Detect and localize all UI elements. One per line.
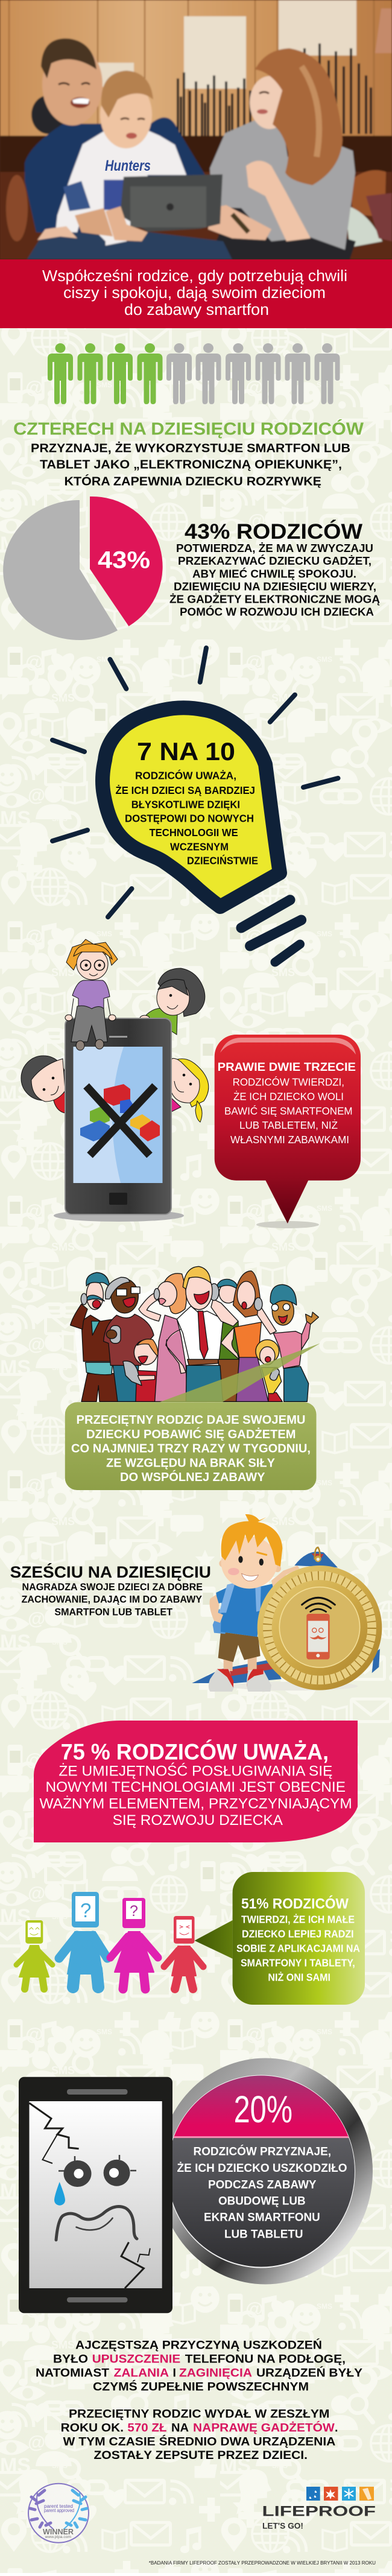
dark-skinned man with glasses xyxy=(104,1277,154,1401)
badge text: EKRAN SMARTFONU xyxy=(204,2212,320,2224)
medal xyxy=(258,1547,382,1690)
callout text: DO WSPÓLNEJ ZABAWY xyxy=(120,1470,265,1484)
callout text xyxy=(218,1061,356,1146)
round badge 20% xyxy=(158,2058,373,2284)
logo: LifeProof xyxy=(262,2487,376,2531)
callout text: CO NAJMNIEJ TRZY RAZY W TYGODNIU, xyxy=(71,1442,311,1456)
heading: four in ten parents: CZTERECH NA DZIESIĘCIU RODZICÓW xyxy=(13,419,364,439)
banner headline: do zabawy smartfon xyxy=(124,302,269,319)
pink box text: ŻE UMIEJĘTNOŚĆ POSŁUGIWANIA SIĘ xyxy=(58,1762,332,1779)
callout text: PRZECIĘTNY RODZIC DAJE SWOJEMU xyxy=(76,1413,305,1427)
boy at back xyxy=(216,1279,239,1401)
callout text: BAWIĆ SIĘ SMARTFONEM xyxy=(224,1104,353,1117)
text block: 43% of parents xyxy=(169,519,380,618)
pink box text: WAŻNYM ELEMENTEM, PRZYCZYNIAJĄCYM xyxy=(40,1795,352,1812)
text block: most common damage: BYŁO xyxy=(53,2353,88,2366)
logo icons xyxy=(306,2487,374,2501)
speech bubble text: DZIECKO LEPIEJ RADZI xyxy=(242,1928,354,1940)
text block: 43% of parents: POMÓC W ROZWOJU ICH DZIECKA xyxy=(180,606,374,618)
text block: most common damage: TELEFONU NA PODŁOGĘ, xyxy=(185,2353,346,2366)
text block: six in ten xyxy=(10,1562,211,1617)
pink box: 75% of parents xyxy=(34,1721,358,1842)
red banner xyxy=(0,259,392,328)
smartphone body xyxy=(65,1018,171,1214)
text block: most common damage: UPUSZCZENIE xyxy=(92,2353,180,2366)
text block: repair costs: W TYM CZASIE ŚREDNIO DWA URZĄDZENIA xyxy=(63,2434,335,2448)
speech bubble text xyxy=(236,1895,360,1983)
badge text: ŻE ICH DZIECKO USZKODZIŁO xyxy=(177,2162,347,2175)
text block: most common damage: ZALANIA xyxy=(114,2366,169,2379)
speech bubble text: TWIERDZI, ŻE ICH MAŁE xyxy=(241,1914,355,1926)
text block: most common damage xyxy=(36,2338,362,2394)
figure: red child xyxy=(164,1916,203,1989)
ground shadow xyxy=(229,1682,358,1690)
text block: repair costs: PRZECIĘTNY RODZIC WYDAŁ W ZESZŁYM xyxy=(69,2407,329,2420)
crying eyes and tear xyxy=(54,2155,136,2206)
figure: blue parent: ? xyxy=(80,1899,91,1921)
award badge: parent tested: WINNER xyxy=(43,2527,74,2536)
hero photo: family with tablet: Hunters xyxy=(105,157,151,174)
text block: six in ten: NAGRADZA SWOJE DZIECI ZA DOBRE xyxy=(22,1582,203,1593)
logo: LifeProof: LET'S GO! xyxy=(262,2521,303,2531)
man with red tie xyxy=(166,1266,238,1401)
girl with phone xyxy=(256,1340,282,1401)
text block: six in ten: SMARTFON LUB TABLET xyxy=(54,1607,172,1617)
callout text: LUB TABLETEM, NIŻ xyxy=(239,1119,338,1131)
bulb text: 7 in 10: TECHNOLOGII WE xyxy=(150,826,238,839)
callout text: DZIECKU POBAWIĆ SIĘ GADŻETEM xyxy=(86,1427,296,1441)
text block: electronic nanny xyxy=(31,441,350,488)
phone screen xyxy=(74,1047,163,1183)
boy head xyxy=(219,1514,282,1588)
text block: repair costs: ROKU OK. xyxy=(61,2422,124,2435)
toy bricks xyxy=(80,1084,160,1141)
text block: repair costs: 570 ZŁ xyxy=(127,2422,167,2435)
badge text: LUB TABLETU xyxy=(224,2228,303,2241)
text block: 43% of parents: 43% RODZICÓW xyxy=(185,519,362,544)
callout text: WŁASNYMI ZABAWKAMI xyxy=(230,1134,349,1146)
badge text: 20% xyxy=(234,2089,292,2131)
text block: 43% of parents: DZIEWIĘCIU NA DZIESIĘCIU WIERZY, xyxy=(174,580,376,592)
award badge: parent tested: www.ptpa.com xyxy=(45,2535,71,2539)
woman in orange top xyxy=(221,1271,276,1401)
callout text: RODZICÓW TWIERDZI, xyxy=(233,1075,344,1088)
family of device-headed figures xyxy=(16,1892,203,1989)
footnote: *BADANIA FIRMY LIFEPROOF ZOSTAŁY PRZEPROWADZONE W WIELKIEJ BRYTANII W 2013 ROKU xyxy=(149,2560,376,2566)
bulb text: 7 in 10: DZIECIŃSTWIE xyxy=(187,854,258,866)
text block: most common damage: AJCZĘSTSZĄ PRZYCZYNĄ USZKODZEŃ xyxy=(75,2338,322,2352)
text block: 43% of parents: ABY MIEĆ CHWILĘ SPOKOJU. xyxy=(192,567,356,580)
pie chart 43%: 43% xyxy=(98,547,150,574)
text block: most common damage: I xyxy=(172,2366,176,2379)
figure: lime child xyxy=(16,1920,52,1989)
text block: repair costs: . xyxy=(335,2422,338,2435)
callout: red speech pin xyxy=(215,1035,361,1228)
text block: electronic nanny: KTÓRA ZAPEWNIA DZIECKU ROZRYWKĘ xyxy=(64,474,321,488)
shirt and backpack xyxy=(209,1566,300,1637)
kid right xyxy=(169,1058,209,1122)
logo: LifeProof: LIFEPROOF xyxy=(262,2504,376,2520)
callout text: ŻE ICH DZIECKO WOLI xyxy=(233,1090,344,1102)
text block: six in ten: ZACHOWANIE, DAJĄC IM DO ZABAWY xyxy=(22,1594,202,1605)
woman in pink dress xyxy=(139,1274,187,1401)
phone shadow xyxy=(54,1210,184,1222)
badge text: RODZICÓW PRZYZNAJE, xyxy=(193,2145,331,2159)
text block: electronic nanny: PRZYZNAJE, ŻE WYKORZYSTUJE SMARTFON LUB xyxy=(31,441,350,455)
boy legs and shoes xyxy=(209,1657,271,1692)
bulb text: 7 in 10: ŻE ICH DZIECI SĄ BARDZIEJ xyxy=(116,784,255,796)
text block: repair costs: ZOSTAŁY ZEPSUTE PRZEZ DZIECI. xyxy=(94,2449,308,2462)
pink box text: NOWYMI TECHNOLOGIAMI JEST OBECNIE xyxy=(46,1779,346,1795)
banner headline xyxy=(42,268,347,319)
sad mouth xyxy=(56,2207,137,2240)
pictogram row: 4 of 10 parents xyxy=(48,343,340,404)
award badge: parent tested: parent approved xyxy=(44,2508,74,2513)
callout text xyxy=(71,1413,311,1484)
text block: most common damage: URZĄDZEŃ BYŁY xyxy=(256,2365,362,2379)
pink box text: 75 % RODZICÓW UWAŻA, xyxy=(61,1739,329,1765)
award badge: parent tested xyxy=(28,2484,89,2543)
text block: most common damage: CZYMŚ ZUPEŁNIE POWSZECHNYM xyxy=(93,2379,309,2394)
shorts xyxy=(218,1632,261,1662)
speech bubble text: 51% RODZICÓW xyxy=(241,1895,349,1912)
pie chart 43% xyxy=(3,496,163,640)
banner headline: ciszy i spokoju, dają swoim dzieciom xyxy=(63,285,326,302)
phone icon with wifi arcs xyxy=(302,1597,335,1660)
callout: green speech bubble 51% xyxy=(194,1872,365,2005)
text block: most common damage: ZAGINIĘCIA xyxy=(179,2366,252,2379)
figure: magenta parent xyxy=(110,1898,158,1989)
badge text: OBUDOWĘ LUB xyxy=(218,2195,306,2207)
speech bubble text: NIŻ ONI SAMI xyxy=(268,1971,330,1983)
broken sad smartphone xyxy=(19,2077,172,2313)
callout text: ZE WZGLĘDU NA BRAK SIŁY xyxy=(106,1457,276,1470)
bulb text: 7 in 10: RODZICÓW UWAŻA, xyxy=(135,769,236,782)
pink box text: SIĘ ROZWOJU DZIECKA xyxy=(113,1812,283,1829)
speech bubble text: SMARTFONY I TABLETY, xyxy=(241,1956,355,1968)
text block: repair costs: NAPRAWĘ GADŻETÓW xyxy=(193,2420,335,2435)
badge text xyxy=(177,2089,347,2241)
bulb text: 7 in 10: BŁYSKOTLIWE DZIĘKI xyxy=(131,798,240,810)
award badge: parent tested: parent tested xyxy=(44,2504,73,2509)
illustration: boy with medal xyxy=(192,1514,382,1692)
bulb text: 7 in 10: WCZESNYM xyxy=(170,840,229,852)
man with moustache xyxy=(71,1272,118,1401)
kid on top of phone xyxy=(65,939,118,1050)
text block: repair costs: NA xyxy=(171,2422,189,2435)
callout: green rounded box with tail xyxy=(65,1344,320,1490)
kid left xyxy=(21,1056,66,1113)
text block: six in ten: SZEŚCIU NA DZIESIĘCIU xyxy=(10,1562,211,1581)
black X over toys xyxy=(86,1086,155,1155)
callout text: PRAWIE DWIE TRZECIE xyxy=(218,1061,356,1074)
bulb text: 7 in 10: 7 NA 10 xyxy=(137,737,235,766)
text block: 43% of parents: ŻE GADŻETY ELEKTRONICZNE MOGĄ xyxy=(169,592,380,605)
light bulb with rays xyxy=(52,648,338,962)
bulb text: 7 in 10: DOSTĘPOWI DO NOWYCH xyxy=(125,813,254,825)
child with tablet xyxy=(123,1339,159,1401)
text block: repair costs xyxy=(61,2407,338,2462)
illustration: group of parents and kids with phones xyxy=(71,1266,318,1401)
figure: blue parent xyxy=(59,1892,107,1987)
speaker and home button xyxy=(109,1036,127,1205)
text block: electronic nanny: TABLET JAKO „ELEKTRONICZNĄ OPIEKUNKĘ”, xyxy=(40,458,342,472)
pink box text xyxy=(40,1739,352,1829)
banner headline: Współcześni rodzice, gdy potrzebują chwili xyxy=(42,268,347,285)
text block: most common damage: NATOMIAST xyxy=(36,2366,109,2379)
illustration: kids around smartphone xyxy=(21,939,209,1222)
badge text: PODCZAS ZABAWY xyxy=(208,2178,317,2191)
screen cracks xyxy=(29,2103,150,2288)
kid right-top hair and shirt behind phone xyxy=(140,968,205,1035)
text block: 43% of parents: POTWIERDZA, ŻE MA W ZWYCZAJU xyxy=(176,542,373,554)
white backing behind figures xyxy=(74,1273,308,1401)
hero photo: family with tablet xyxy=(0,0,392,259)
text block: 43% of parents: PRZEKAZYWAĆ DZIECKU GADŻET, xyxy=(178,554,371,567)
ribbon xyxy=(192,1552,380,1683)
speech bubble text: SOBIE Z APLIKACJAMI NA xyxy=(236,1943,360,1955)
bulb text: 7 in 10 xyxy=(116,737,258,866)
figure: magenta parent: ? xyxy=(130,1903,138,1920)
woman with glasses waving xyxy=(270,1284,318,1401)
